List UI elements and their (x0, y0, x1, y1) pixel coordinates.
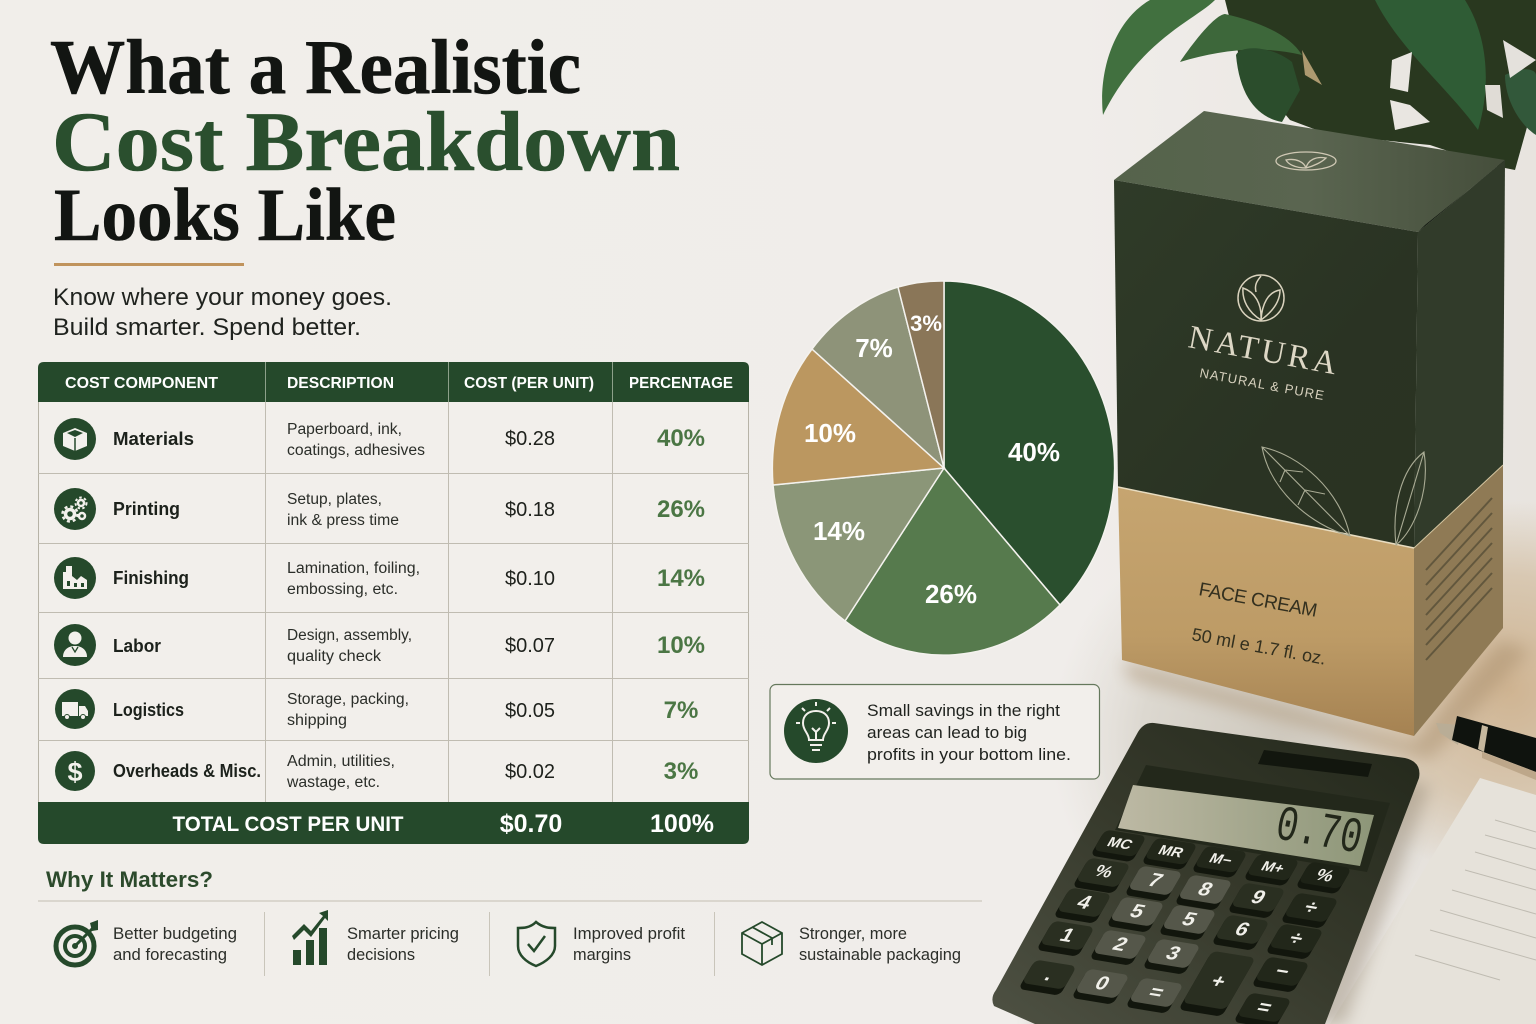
calculator keys: % (1091, 861, 1117, 881)
icon: factory (54, 557, 96, 599)
benefit: budgeting: and forecasting (113, 946, 227, 964)
calculator keys: + (1206, 971, 1230, 993)
calculator keys (1018, 829, 1352, 1024)
row: labor: $0.07 (505, 635, 555, 657)
row: labor: Design, assembly, (287, 627, 412, 644)
pie chart: 3% (910, 311, 942, 336)
benefit: packaging (742, 922, 961, 965)
row: printing: Printing (113, 499, 180, 519)
table header: COST COMPONENT (65, 375, 218, 392)
row: overheads: wastage, etc. (286, 774, 380, 791)
box top flap (1114, 111, 1505, 232)
benefit: profit: Improved profit (573, 925, 685, 943)
row: materials: Materials (113, 429, 194, 449)
calculator keys: − (1270, 961, 1294, 983)
calculator (992, 723, 1430, 1024)
calculator keys: 3 (1162, 943, 1185, 964)
pie chart: 26% (925, 579, 977, 609)
icon: package box (742, 922, 782, 965)
row: finishing: Finishing (113, 568, 189, 588)
cost table (38, 362, 749, 844)
calculator keys: 6 (1231, 919, 1254, 940)
small print lines on side (1426, 498, 1492, 660)
pie chart: 10% (804, 418, 856, 448)
row: logistics (55, 689, 698, 729)
row: finishing (54, 557, 705, 599)
calculator keys: ÷ (1300, 897, 1323, 919)
box volume: 50 ml e 1.7 fl. oz. (1190, 624, 1328, 669)
callout: areas can lead to big (867, 723, 1027, 742)
plant leaves (1102, 0, 1536, 170)
row: finishing: 14% (657, 565, 705, 592)
subtitle: Know where your money goes. (53, 284, 392, 311)
benefit: pricing: Smarter pricing (347, 925, 459, 943)
calculator keys: MC (1104, 834, 1136, 853)
callout: profits in your bottom line. (867, 745, 1071, 764)
icon: target (56, 920, 98, 965)
calculator keys: M− (1206, 851, 1236, 869)
callout (770, 684, 1100, 779)
row: overheads (55, 751, 698, 791)
row: overheads: Admin, utilities, (287, 753, 395, 770)
icon: worker (54, 624, 96, 666)
calculator keys: % (1312, 865, 1338, 885)
row: labor: Labor (113, 636, 161, 656)
benefit: packaging: sustainable packaging (799, 946, 961, 964)
benefit: budgeting: Better budgeting (113, 925, 237, 943)
pie chart: 7% (855, 333, 893, 363)
table surface (1040, 500, 1536, 980)
box kraft side (1414, 465, 1503, 736)
calculator keys: . (1041, 964, 1058, 985)
pie chart: 40% (1008, 437, 1060, 467)
box logo emblem (1238, 275, 1284, 321)
row: labor: quality check (287, 648, 381, 665)
benefit: pricing (292, 910, 459, 965)
row: printing: 26% (657, 496, 705, 523)
table total row (38, 802, 749, 844)
row: printing: ink & press time (287, 512, 399, 529)
icon: shield check (518, 922, 555, 966)
table total row: 100% (650, 810, 714, 838)
display readout: 0.70 (1271, 798, 1367, 868)
table header: PERCENTAGE (629, 375, 733, 392)
row: materials: Paperboard, ink, (287, 421, 402, 438)
solar strip (1258, 750, 1372, 777)
calculator keys: 5 (1178, 909, 1201, 931)
icon: box (54, 418, 96, 460)
pen (1436, 716, 1536, 780)
icon: lightbulb (784, 699, 848, 763)
icon: dollar: $ (67, 757, 83, 787)
calculator keys: M+ (1258, 859, 1288, 877)
calculator keys: 4 (1073, 892, 1096, 914)
box top logo (1276, 152, 1336, 170)
icon: gears (54, 488, 96, 530)
row: printing: $0.18 (505, 499, 555, 521)
calculator keys: 5 (1126, 901, 1149, 923)
title: Looks Like (54, 174, 396, 257)
calculator keys: 9 (1247, 887, 1270, 908)
table total row: TOTAL COST PER UNIT (172, 813, 404, 836)
row: labor: 10% (657, 632, 705, 659)
subtitle (53, 284, 392, 341)
table header: DESCRIPTION (287, 375, 394, 392)
benefit: budgeting (56, 920, 237, 965)
row: logistics: $0.05 (505, 700, 555, 722)
display bezel and screen (1115, 765, 1390, 872)
title underline (54, 263, 244, 266)
calculator keys: ÷ (1285, 928, 1308, 950)
title: What a Realistic (50, 24, 581, 110)
icon: dollar (55, 751, 95, 791)
row: logistics: shipping (287, 712, 347, 729)
row: materials (54, 418, 705, 460)
box brand name: NATURA (1186, 319, 1340, 382)
notepaper (1330, 778, 1536, 1024)
box tagline: NATURAL & PURE (1198, 365, 1325, 403)
callout: Small savings in the right (867, 701, 1060, 720)
row: printing: Setup, plates, (287, 491, 382, 508)
table total row: $0.70 (500, 810, 562, 838)
box kraft front (1118, 487, 1414, 736)
row: finishing: Lamination, foiling, (287, 560, 420, 577)
row: finishing: embossing, etc. (287, 581, 398, 598)
row: overheads: $0.02 (505, 761, 555, 783)
row: materials: coatings, adhesives (287, 442, 425, 459)
benefit: pricing: decisions (347, 946, 415, 964)
calculator keys: = (1144, 982, 1168, 1004)
row: finishing: $0.10 (505, 568, 555, 590)
box front dark panel (1114, 180, 1418, 548)
title: Cost Breakdown (52, 95, 680, 189)
benefit: profit (518, 922, 685, 966)
packaging box (1114, 111, 1505, 736)
row: logistics: Storage, packing, (287, 691, 409, 708)
row: logistics: 7% (664, 697, 698, 724)
row: logistics: Logistics (113, 700, 184, 720)
box shadow (1122, 640, 1530, 760)
calculator keys: 8 (1194, 879, 1217, 901)
row: overheads: Overheads & Misc. (113, 761, 261, 781)
why it matters heading: Why It Matters? (46, 867, 213, 892)
calculator keys: MR (1155, 842, 1187, 861)
box leaf line art (1262, 447, 1425, 545)
calculator keys: = (1252, 997, 1276, 1019)
calculator keys: 1 (1056, 925, 1079, 947)
benefit: profit: margins (573, 946, 631, 964)
row: labor (54, 624, 705, 666)
title (50, 24, 680, 257)
subtitle: Build smarter. Spend better. (53, 314, 361, 341)
box product name: FACE CREAM (1197, 579, 1319, 622)
calculator keys: 0 (1091, 973, 1114, 994)
icon: rising bar chart (292, 910, 328, 965)
pie chart: 14% (813, 516, 865, 546)
photo: packaging box, plant and calculator scene (992, 0, 1536, 1024)
calculator keys: 2 (1109, 934, 1132, 955)
pie chart (772, 281, 1115, 655)
row: materials: 40% (657, 425, 705, 452)
row: materials: $0.28 (505, 428, 555, 450)
benefit: packaging: Stronger, more (799, 925, 907, 943)
box right dark panel (1414, 160, 1505, 548)
row: printing (54, 488, 705, 530)
table header (38, 362, 749, 402)
table header: COST (PER UNIT) (464, 375, 594, 392)
calculator keys: 7 (1144, 870, 1167, 891)
icon: truck (55, 689, 95, 729)
row: overheads: 3% (664, 758, 698, 785)
